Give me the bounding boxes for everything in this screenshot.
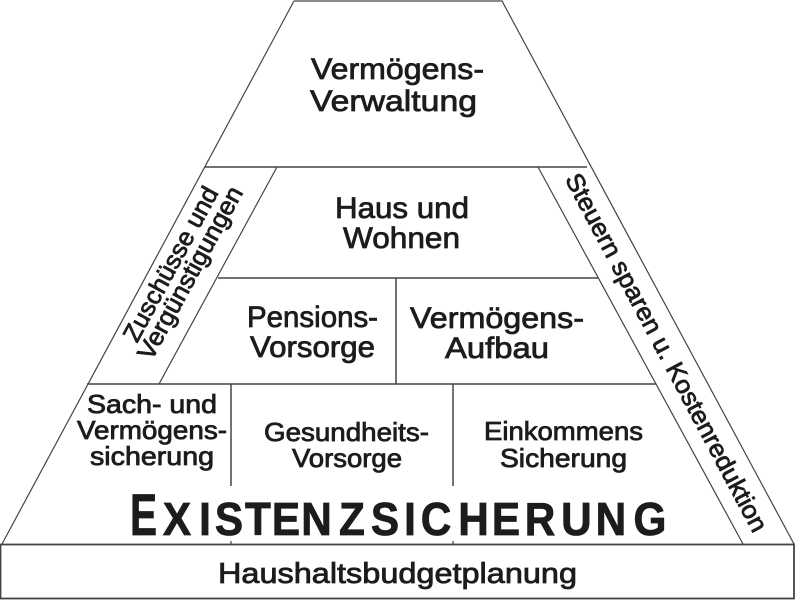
side label: Zuschüsse und Vergünstigungen: Zuschüsse und bbox=[118, 182, 224, 346]
heading: Vermögens-Verwaltung: Verwaltung bbox=[310, 85, 477, 118]
heading: Gesundheits-Vorsorge bbox=[264, 417, 429, 473]
side label: Steuern sparen u. Kostenreduktion: Steuern sparen u. Kostenreduktion bbox=[559, 169, 773, 537]
side label: Zuschüsse und Vergünstigungen: Vergünstigungen bbox=[132, 182, 249, 365]
heading: Sach- und Vermögenssicherung: Vermögens- bbox=[77, 415, 227, 445]
heading: Vermögens-Aufbau: Aufbau bbox=[445, 332, 549, 365]
heading: Vermögens-Aufbau: Vermögens- bbox=[410, 302, 584, 335]
base label: Haushaltsbudgetplanung: Haushaltsbudgetplanung bbox=[218, 558, 577, 590]
base bar bbox=[0, 544, 794, 598]
heading: Existenzsicherung: XISTENZSICHERUNG bbox=[163, 494, 666, 545]
heading: Pensions-Vorsorge: Vorsorge bbox=[250, 331, 375, 364]
heading: Einkommens Sicherung bbox=[484, 416, 643, 473]
heading: Sach- und Vermögenssicherung bbox=[77, 389, 227, 471]
heading: Pensions-Vorsorge bbox=[247, 301, 378, 364]
heading: Vermögens-Verwaltung: Vermögens- bbox=[311, 53, 484, 86]
heading: Gesundheits-Vorsorge: Gesundheits- bbox=[264, 417, 429, 447]
heading: Vermögens-Verwaltung bbox=[310, 53, 484, 118]
heading: Einkommens Sicherung: Sicherung bbox=[500, 443, 627, 473]
heading: Pensions-Vorsorge: Pensions- bbox=[247, 301, 378, 334]
heading: Gesundheits-Vorsorge: Vorsorge bbox=[292, 443, 402, 473]
heading: Vermögens-Aufbau bbox=[410, 302, 584, 365]
heading: Haus und Wohnen: Wohnen bbox=[343, 222, 460, 255]
heading: Haus und Wohnen: Haus und bbox=[335, 192, 469, 225]
heading: Existenzsicherung: E bbox=[130, 483, 157, 548]
heading: Einkommens Sicherung: Einkommens bbox=[484, 416, 643, 446]
heading: Sach- und Vermögenssicherung: sicherung bbox=[90, 441, 214, 471]
heading: Haus und Wohnen bbox=[335, 192, 469, 255]
heading: Sach- und Vermögenssicherung: Sach- und bbox=[87, 389, 217, 419]
